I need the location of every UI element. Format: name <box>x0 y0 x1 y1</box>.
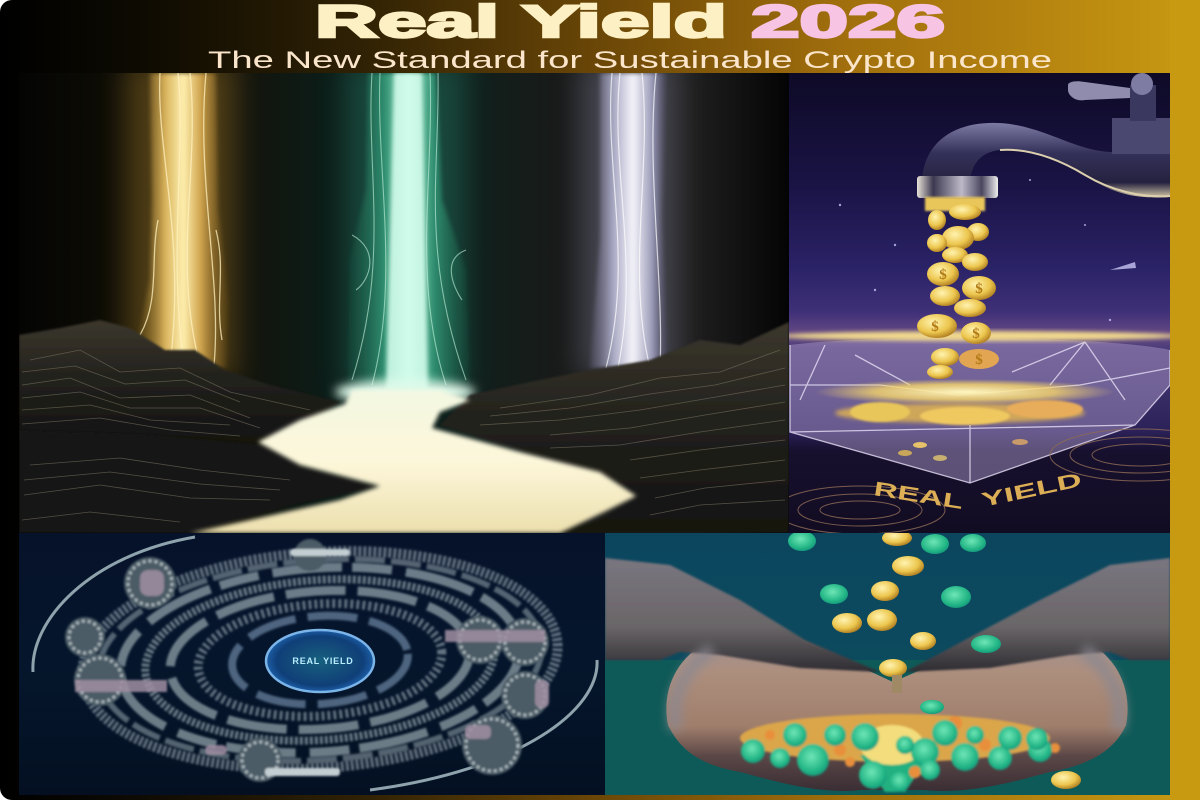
label: real yield: REAL <box>872 478 965 514</box>
icon: falling coins: $ <box>975 281 983 297</box>
gear clusters <box>65 539 549 782</box>
icon: falling coins: $ <box>939 267 947 283</box>
hand side highlights <box>674 650 1120 730</box>
gear rings <box>75 536 565 784</box>
icon: falling coins: $ <box>931 319 939 335</box>
left hand <box>666 639 893 791</box>
left arm <box>605 558 880 672</box>
hub: real yield: REAL YIELD <box>292 656 354 666</box>
crystal basin <box>790 338 1170 483</box>
coin pile in palms <box>740 714 1060 792</box>
right hand <box>893 651 1128 791</box>
terrain: left hills <box>19 320 340 445</box>
panel: three pillars of light and river <box>19 60 789 533</box>
outer ring arcs <box>33 537 597 790</box>
gold right margin <box>1170 0 1200 800</box>
falling coins <box>788 530 1081 789</box>
icon: stars <box>839 179 1136 321</box>
coin pile with glow <box>815 379 1115 461</box>
icon: falling coins <box>917 197 999 379</box>
terrain texture <box>22 350 785 522</box>
glow at river source <box>335 380 475 404</box>
panel: tap pouring coins <box>789 73 1170 533</box>
label: real yield: YIELD <box>979 469 1084 512</box>
icon: tap faucet <box>917 73 1170 198</box>
icon: falling coins: $ <box>975 352 983 368</box>
beam: gold <box>125 60 235 380</box>
hub: real yield <box>266 630 374 692</box>
beam: green <box>345 60 470 390</box>
ripple rings <box>789 428 1170 533</box>
label: real yield <box>875 474 1080 509</box>
right arm <box>905 558 1170 672</box>
panel: gear mechanism <box>19 533 605 795</box>
terrain: front left shore <box>19 430 380 533</box>
beam: white <box>580 60 676 375</box>
panel: hands catching coins <box>605 530 1170 795</box>
terrain: right hills <box>440 322 789 533</box>
icon: falling coins: $ <box>972 326 980 342</box>
horizon glow <box>780 331 1180 341</box>
subtitle: The New Standard for Sustainable Crypto Income <box>208 47 1052 74</box>
river of light <box>190 390 636 533</box>
